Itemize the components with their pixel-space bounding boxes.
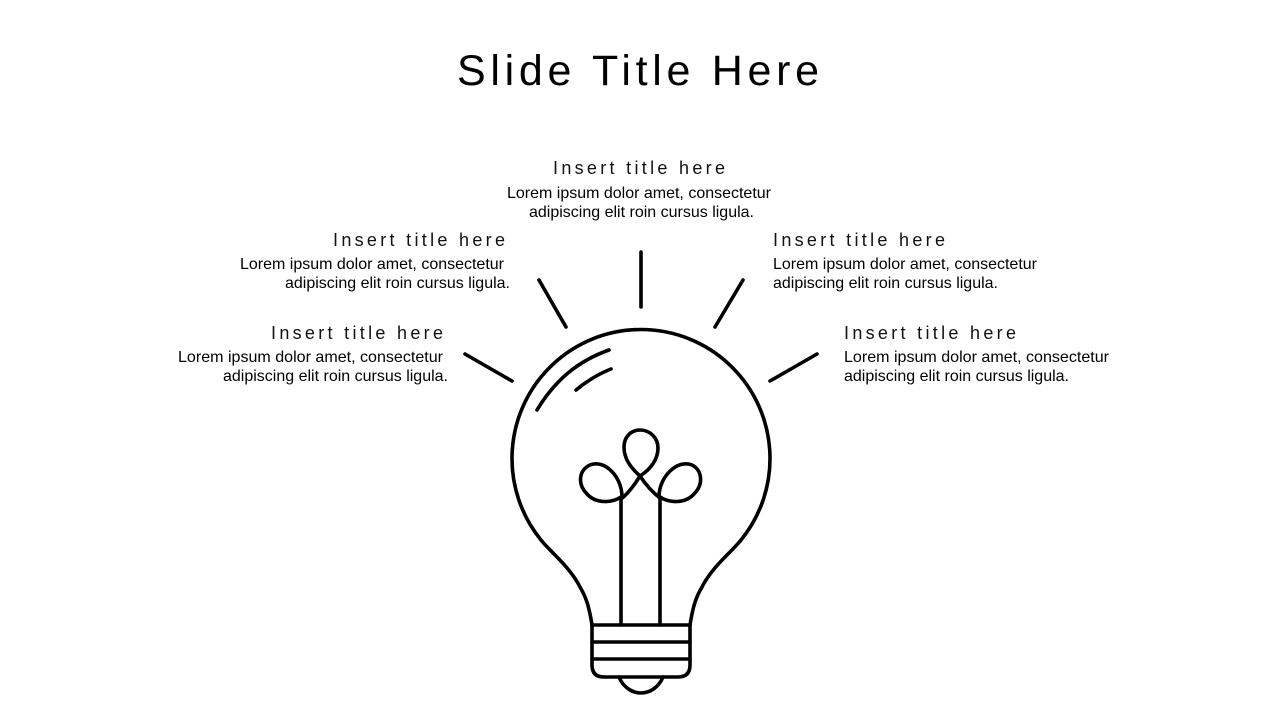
body: lower right: adipiscing elit roin cursus ligula.	[844, 368, 1069, 385]
glass highlights	[537, 350, 611, 410]
text block: lower left	[178, 323, 448, 385]
heading: upper left: Insert title here	[333, 230, 505, 250]
text block: upper right	[773, 230, 1038, 292]
bulb glass outline	[512, 330, 770, 625]
body: upper right: adipiscing elit roin cursus ligula.	[773, 275, 998, 292]
screw base	[592, 625, 690, 693]
body: top: Lorem ipsum dolor amet, consectetur	[507, 185, 772, 202]
body: upper left: Lorem ipsum dolor amet, consectetur	[240, 256, 505, 273]
text block: lower right	[844, 323, 1110, 385]
body: upper right: Lorem ipsum dolor amet, consectetur	[773, 256, 1038, 273]
icon: light bulb	[512, 330, 770, 693]
body: lower right	[844, 349, 1110, 385]
body: lower left: Lorem ipsum dolor amet, consectetur	[178, 349, 444, 366]
text block: upper left	[240, 230, 510, 292]
body: top: adipiscing elit roin cursus ligula.	[529, 204, 754, 221]
heading: lower left: Insert title here	[271, 323, 443, 343]
heading: upper right: Insert title here	[773, 230, 945, 250]
body: lower left: adipiscing elit roin cursus ligula.	[223, 368, 448, 385]
body: upper left	[240, 256, 510, 292]
heading: lower right: Insert title here	[844, 323, 1016, 343]
body: upper right	[773, 256, 1038, 292]
filament	[581, 430, 701, 625]
title: Slide Title Here	[457, 47, 819, 95]
body: lower right: Lorem ipsum dolor amet, consectetur	[844, 349, 1110, 366]
heading: top: Insert title here	[553, 158, 725, 178]
text block: top	[507, 158, 772, 221]
body: upper left: adipiscing elit roin cursus ligula.	[285, 275, 510, 292]
body: lower left	[178, 349, 448, 385]
light rays	[465, 252, 817, 381]
body: top	[507, 185, 772, 221]
